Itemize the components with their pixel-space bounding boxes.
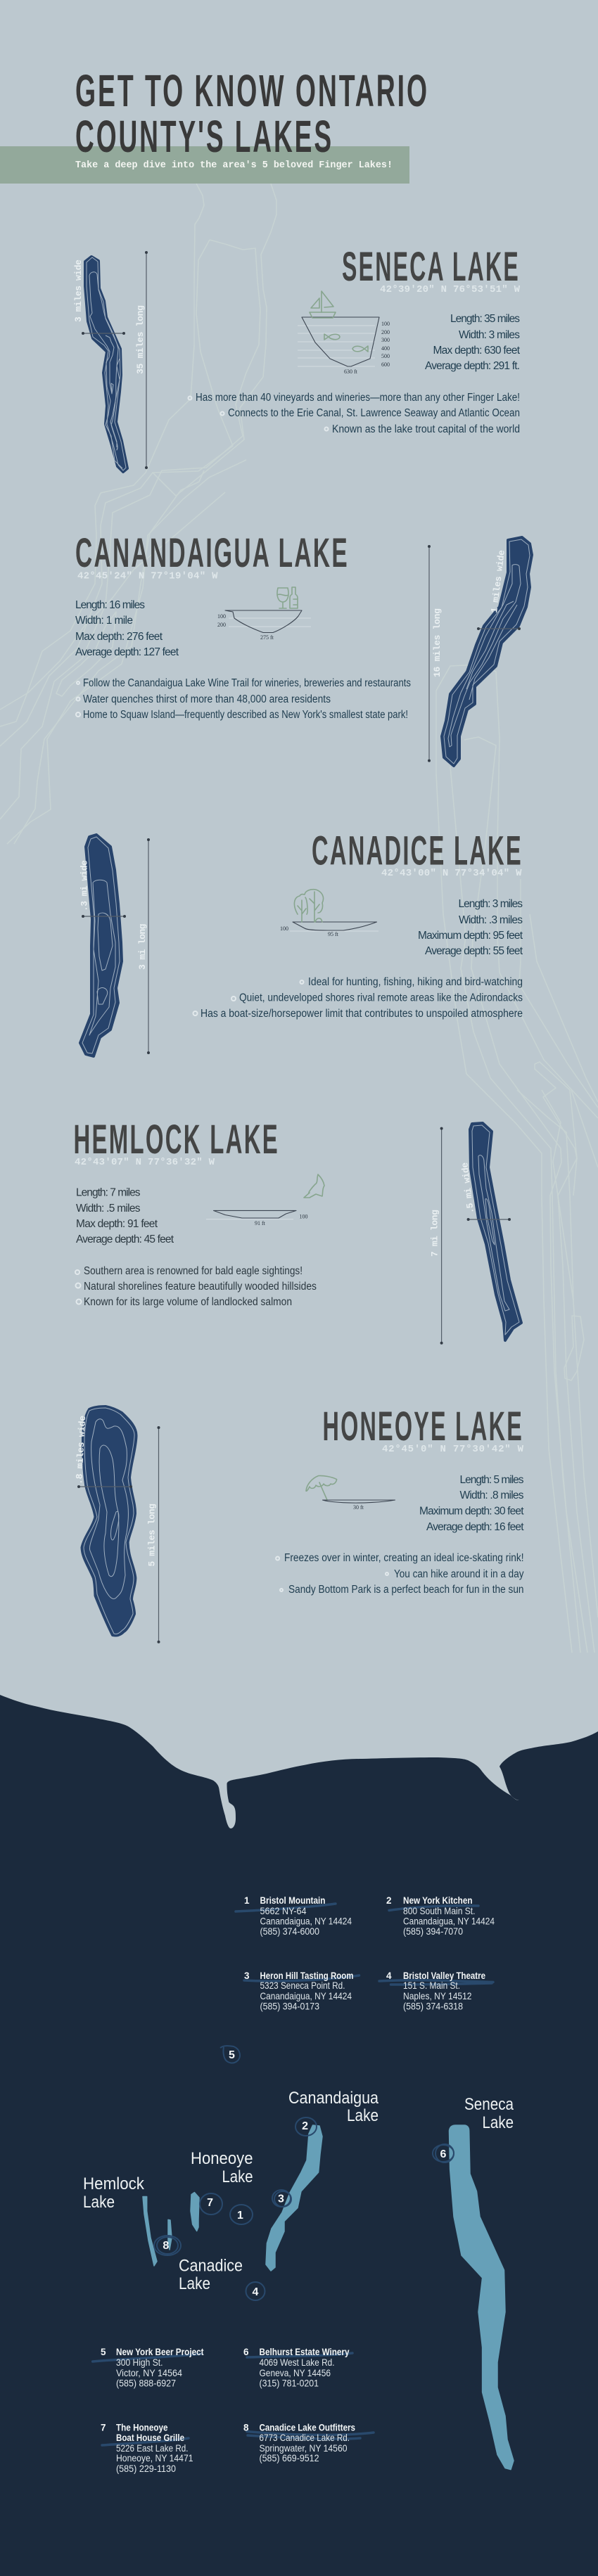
facts [189,392,520,435]
depth profile chart [206,1210,308,1226]
listing 3: Heron Hill Tasting Room [260,1970,353,1981]
stats: Average depth: 291 ft. [425,360,520,372]
stats: Length: 3 miles [459,898,523,910]
coordinates: 42°43′07″ N 77°36′32″ W [75,1157,215,1168]
panel: Canandaigua Lake [75,530,532,766]
depth profile chart: 100 [217,613,226,620]
pin 4: 4 [253,2286,259,2298]
map: Seneca Lake outline [85,257,127,472]
depth profile chart: 300 [381,337,390,343]
listing 5: (585) 888-6927 [116,2377,176,2388]
label: length: 35 miles long [135,305,146,374]
pin 2: 2 [302,2120,308,2132]
stats [76,1187,174,1245]
listing 3: 5323 Seneca Point Rd. [260,1980,345,1991]
depth profile chart [280,922,378,937]
listing 8: (585) 669-9512 [259,2452,319,2463]
facts: Known for its large volume of landlocked salmon [84,1296,292,1308]
facts: Sandy Bottom Park is a perfect beach for fun in the sun [288,1584,523,1596]
stats [425,313,521,372]
stats: Max depth: 276 feet [75,631,163,643]
pin 3: 3 [278,2193,284,2205]
listing 3 [244,1970,359,2011]
label: Hemlock Lake: Hemlock [83,2174,145,2193]
listing 8: 6773 Canadice Lake Rd. [259,2432,350,2443]
label: width: .5 mi wide [459,1162,476,1214]
stats: Width: .5 miles [76,1203,141,1215]
depth profile chart: 91 ft [255,1220,266,1226]
listing 7: 7 [101,2422,106,2433]
label: width: .3 mi wide [79,860,90,911]
listing 6: Belhurst Estate Winery [259,2346,350,2357]
label: Honeoye Lake [191,2149,253,2186]
listing 5: Victor, NY 14564 [116,2367,182,2378]
label: width: 1 miles wide [489,549,507,613]
label: Hemlock Lake [83,2174,145,2212]
depth profile chart: 275 ft [260,634,274,641]
listing 8 [243,2422,374,2463]
facts: Has more than 40 vineyards and wineries—more than any other Finger Lake! [196,392,520,404]
lake: Canadice [168,2219,172,2250]
listing 5: 300 High St. [116,2357,163,2368]
depth profile chart: 200 [381,329,390,335]
listing 2 [386,1895,495,1937]
map of lakes [83,2046,514,2470]
label: length: 7 mi long [430,1210,440,1257]
stats [75,599,179,658]
icon: trees [294,890,324,922]
stats: Width: .8 miles [460,1489,524,1501]
listing 4 [379,1970,493,2011]
coordinates: 42°43′00″ N 77°34′04″ W [381,868,522,879]
label: width: 3 miles wide [73,259,84,322]
map: Canadice Lake outline [80,835,122,1056]
map section: listings row 1 [236,1895,495,2011]
listing 1: 1 [244,1895,250,1906]
panel: Hemlock Lake [73,1117,521,1345]
listing 8: Springwater, NY 14560 [259,2442,348,2454]
lake: Hemlock [143,2197,157,2266]
listing 7: Honeoye, NY 14471 [116,2452,193,2463]
lake: Honeoye [191,2193,199,2231]
label: Seneca Lake: Lake [483,2113,514,2132]
label: Hemlock Lake: Lake [83,2193,115,2212]
stats: Average depth: 55 feet [425,945,523,957]
facts: You can hike around it in a day [394,1568,524,1580]
facts: Known as the lake trout capital of the world [332,423,520,435]
listing 1: 5662 NY-64 [260,1905,307,1916]
depth profile chart: 100 [280,925,288,932]
listing 4: Bristol Valley Theatre [403,1970,485,1981]
listing 2: Canandaigua, NY 14424 [403,1916,495,1927]
label: length: 5 miles long [146,1504,158,1567]
depth profile chart: 95 ft [328,931,339,937]
listing 3: Canandaigua, NY 14424 [260,1990,352,2001]
listing 2: 800 South Main St. [403,1905,476,1916]
pin 8: 8 [163,2240,169,2252]
stats [419,1474,524,1533]
listing 6: Geneva, NY 14456 [259,2367,331,2378]
facts [76,677,411,721]
listing 4: (585) 374-6318 [403,2000,463,2011]
pin 4 [246,2282,265,2300]
depth profile chart: 600 [381,361,390,368]
stats: Max depth: 91 feet [76,1218,158,1230]
depth profile chart: 100 [300,1214,308,1220]
listing 6: 6 [243,2347,249,2357]
label: Canandaigua Lake: Canandaigua [288,2089,379,2108]
listing 4: Naples, NY 14512 [403,1990,472,2001]
label: length: 16 miles long [432,608,443,677]
subtitle: Take a deep dive into the area's 5 beloved Finger Lakes! [75,160,393,171]
pin 6: 6 [440,2148,447,2160]
facts: Has a boat-size/horsepower limit that contributes to unspoiled atmosphere [201,1008,523,1020]
facts: Ideal for hunting, fishing, hiking and bird-watching [308,976,523,988]
label: length: 3 mi long [137,923,148,970]
length bar [440,1127,511,1345]
length bar [428,545,521,762]
title: COUNTY'S LAKES [75,111,333,162]
depth profile chart: 200 [217,622,226,628]
listing 6: (315) 781-0201 [259,2377,319,2388]
listing 4: 151 S. Main St. [403,1980,460,1991]
stats: Average depth: 127 feet [75,646,179,658]
depth profile chart: 630 ft [344,369,358,375]
facts: Quiet, undeveloped shores rival remote areas like the Adirondacks [239,992,523,1004]
label: Seneca Lake: Seneca [464,2095,514,2114]
panel: dark map section [0,1695,598,2576]
stats: Length: 7 miles [76,1187,141,1198]
stats: Width: 1 mile [75,615,133,627]
label: Seneca Lake [464,2095,514,2132]
pin 5 [220,2046,240,2063]
title [75,65,429,162]
listing 5: New York Beer Project [116,2346,204,2357]
label: Canandaigua Lake [288,2089,379,2125]
facts: Southern area is renowned for bald eagle sightings! [84,1265,303,1277]
map: Canandaigua Lake outline [442,537,532,766]
listing 8: 8 [243,2422,249,2433]
listing 1 [236,1895,352,1937]
map: Honeoye Lake outline [82,1406,136,1635]
pin 6 [433,2144,454,2162]
listing 7 [101,2422,193,2474]
label: width: .8 miles wide [74,1415,88,1485]
lake: Seneca [449,2125,514,2470]
stats: Maximum depth: 95 feet [418,930,523,942]
listing 6: 4069 West Lake Rd. [259,2357,335,2368]
facts: Water quenches thirst of more than 48,000 area residents [83,693,331,705]
depth profile chart: 500 [381,353,390,359]
depth profile chart [322,1500,395,1511]
coordinates: 42°45′0″ N 77°30′42″ W [382,1444,524,1455]
length bar [82,838,150,1054]
stats: Length: 5 miles [460,1474,524,1486]
icon: sailboat [310,291,336,318]
stats: Average depth: 45 feet [76,1233,174,1245]
stats: Length: 16 miles [75,599,145,611]
coordinates: 42°39′20″ N 76°53′51″ W [380,284,521,295]
stats [418,898,523,957]
map section: listings row 2 [93,2346,374,2474]
pin 7: 7 [207,2197,213,2209]
facts: Follow the Canandaigua Lake Wine Trail for wineries, breweries and restaurants [83,677,411,689]
facts: Connects to the Erie Canal, St. Lawrence Seaway and Atlantic Ocean [228,407,520,419]
depth profile chart [298,317,390,375]
label: Canadice Lake: Canadice [179,2256,243,2276]
label: Canandaigua Lake: Lake [347,2106,378,2125]
map: Hemlock Lake outline [470,1123,521,1340]
subtitle band [0,146,409,184]
listing 8: Canadice Lake Outfitters [259,2422,355,2433]
icon: bird [304,1174,324,1198]
listing 2: (585) 394-7070 [403,1925,463,1937]
listing 1: Bristol Mountain [260,1895,325,1906]
panel: Honeoye Lake [74,1404,524,1643]
pin 3 [272,2190,291,2207]
listing 1: Canandaigua, NY 14424 [260,1916,352,1927]
facts: Home to Squaw Island—frequently described as New York's smallest state park! [83,709,408,721]
listing 7: Boat House Grille [116,2432,184,2443]
facts: Freezes over in winter, creating an ideal ice-skating rink! [284,1552,523,1564]
pin 2 [295,2117,317,2136]
length bar [82,251,148,469]
listing 1: (585) 374-6000 [260,1925,319,1937]
stats: Max depth: 630 feet [433,345,521,357]
lake: Canandaigua [266,2125,322,2271]
listing 2: 2 [386,1895,392,1906]
listing 3: (585) 394-0173 [260,2000,319,2011]
label: Canadice Lake [179,2256,243,2293]
stats: Length: 35 miles [450,313,520,325]
listing 6 [243,2346,352,2388]
stats: Width: .3 miles [459,914,523,926]
icon: fish [324,334,368,352]
facts: Natural shorelines feature beautifully wooded hillsides [84,1281,317,1293]
pin 5: 5 [229,2049,235,2061]
pin 8 [154,2236,181,2255]
heading: Canandaigua Lake: CANANDAIGUA LAKE [75,530,349,576]
depth profile chart: 400 [381,345,390,352]
listing 7: The Honeoye [116,2422,168,2433]
depth profile chart: 100 [381,321,390,327]
listing 7: (585) 229-1130 [116,2463,176,2474]
depth profile chart: 30 ft [353,1504,364,1511]
stats: Width: 3 miles [459,329,520,341]
listing 2: New York Kitchen [403,1895,473,1906]
listing 5 [93,2346,204,2388]
coordinates: 42°45′24″ N 77°19′04″ W [77,571,218,582]
panel: Seneca Lake [73,244,521,472]
label: Honeoye Lake: Lake [222,2167,253,2186]
icon: wine glass and bottle [277,587,298,608]
listing 7: 5226 East Lake Rd. [116,2442,189,2454]
listing 5: 5 [101,2347,106,2357]
pin 7 [200,2193,222,2215]
length bar [77,1426,160,1643]
panel: Canadice Lake [79,828,523,1056]
facts [193,976,523,1020]
depth profile chart [217,610,311,641]
label: Canadice Lake: Lake [179,2274,210,2293]
stats: Average depth: 16 feet [426,1521,524,1533]
heading: Hemlock Lake: HEMLOCK LAKE [73,1117,279,1162]
icon: beach umbrella [306,1475,337,1500]
listing 4: 4 [386,1971,392,1981]
pin 1: 1 [237,2210,243,2222]
listing 3: 3 [244,1971,250,1981]
pin 1 [230,2205,253,2224]
facts [75,1265,317,1308]
stats: Maximum depth: 30 feet [419,1505,524,1518]
facts [276,1552,524,1596]
label: Honeoye Lake: Honeoye [191,2149,253,2168]
